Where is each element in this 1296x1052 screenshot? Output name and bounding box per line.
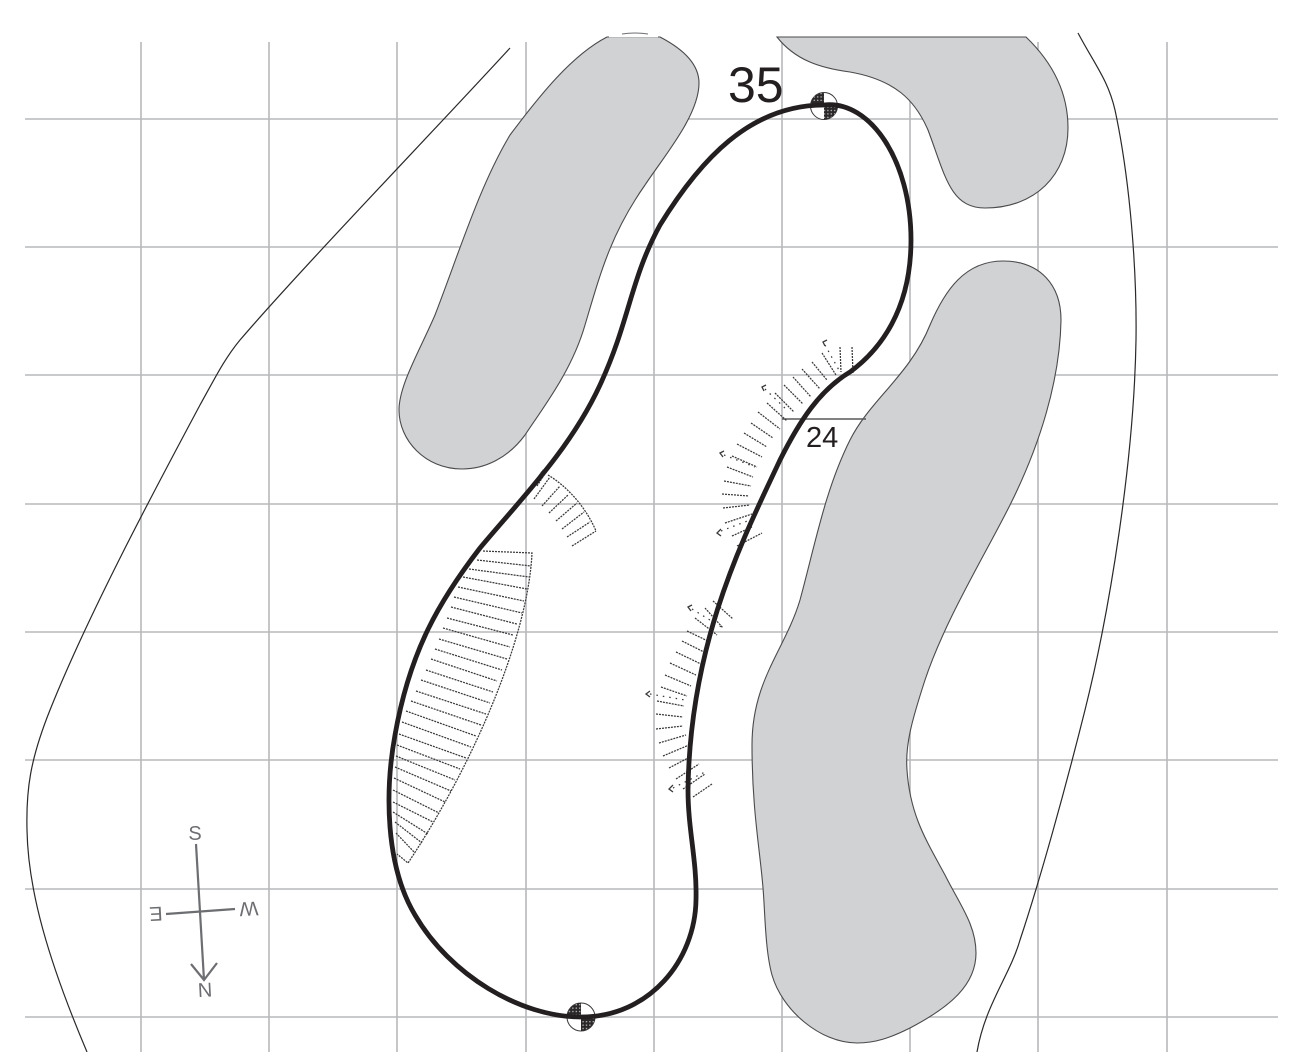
boundary line: right [977, 33, 1136, 1052]
compass: S [188, 823, 202, 845]
route line [389, 105, 911, 1017]
label: 35: 35 [728, 57, 784, 113]
marker: top [810, 92, 838, 120]
grey area: top right [777, 37, 1068, 208]
hatch: lower right slope [646, 601, 733, 797]
compass: W [239, 897, 259, 919]
label: 24: 24 [806, 422, 838, 454]
distance marker line [782, 418, 866, 420]
compass [149, 823, 259, 1000]
hatch: large area [393, 551, 532, 863]
grey area: right [752, 261, 1061, 1043]
compass: E [149, 902, 163, 924]
grey area: upper left [399, 33, 699, 469]
compass: N [197, 978, 213, 1000]
marker: bottom [567, 1003, 595, 1031]
hatch: upper right slope [717, 340, 853, 546]
hatch: small area [534, 470, 596, 546]
boundary line: left [27, 48, 510, 1052]
